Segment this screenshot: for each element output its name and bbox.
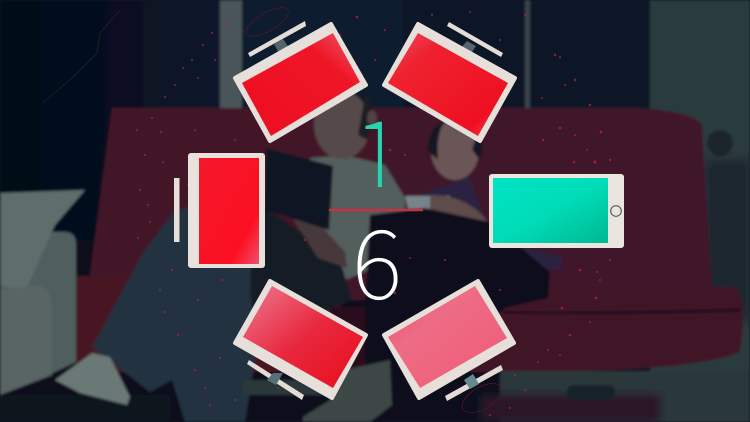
left curtain — [0, 0, 221, 240]
device: bottom-right monitor — [384, 281, 514, 401]
red ellipse sketch top — [242, 2, 292, 42]
woman's shirt — [423, 177, 563, 270]
progress line: red — [329, 209, 423, 211]
sock — [55, 353, 130, 405]
sofa back — [88, 108, 712, 290]
device: left tablet — [174, 153, 265, 268]
curtain cord — [43, 10, 120, 103]
lamp — [707, 130, 733, 156]
man's tablet — [265, 148, 333, 230]
device: top-right monitor — [384, 22, 515, 141]
red particles — [136, 11, 611, 416]
middle curtain — [243, 0, 405, 120]
wall right — [650, 0, 750, 422]
device: bottom-left monitor — [235, 281, 366, 400]
device: right phone with green screen — [489, 174, 624, 248]
man's hand — [287, 208, 347, 268]
white sofa — [0, 232, 76, 392]
lower cushion — [0, 285, 52, 395]
sofa gap — [330, 307, 365, 382]
man sweater — [305, 155, 405, 280]
foot — [303, 360, 392, 422]
stand bar — [248, 21, 306, 57]
bottom table — [500, 371, 750, 422]
device: top-left monitor — [235, 21, 366, 141]
legs — [92, 185, 300, 422]
woman's trousers — [365, 208, 550, 422]
counter numeral: teal one: 1 — [352, 78, 404, 220]
numeral six: 6 — [352, 188, 402, 327]
woman's head — [431, 120, 479, 180]
home button — [611, 206, 621, 216]
sofa seat left — [76, 276, 340, 372]
man's jeans dark — [250, 200, 352, 335]
sofa seat right — [430, 286, 743, 372]
pillow — [0, 190, 85, 292]
man's head — [314, 91, 370, 159]
window strip — [220, 0, 242, 109]
right middle curtain — [403, 0, 650, 115]
red ellipse sketch bottom — [457, 377, 507, 419]
woman's phone — [405, 196, 450, 209]
